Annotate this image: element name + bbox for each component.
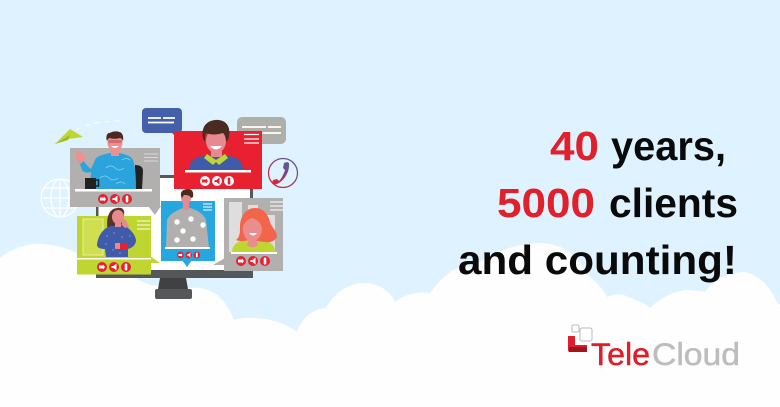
panel: blue caller with dotted sweater — [161, 189, 215, 267]
logo wordmark: Tele — [591, 336, 650, 372]
headline line 3: and counting! — [458, 237, 737, 283]
headline line 1 — [550, 123, 726, 169]
logo icon — [568, 325, 592, 352]
panel: green caller with mug — [77, 208, 160, 274]
headline line 2 — [497, 180, 738, 226]
logo wordmark: Cloud — [652, 336, 740, 372]
icon: paper plane — [55, 121, 122, 144]
logo wordmark — [591, 336, 740, 372]
panel: blue chat bubble — [142, 108, 182, 139]
panel: grey caller with red hair — [213, 198, 283, 271]
panel: grey chat bubble — [237, 117, 286, 144]
icon: phone — [268, 158, 298, 188]
icon: globe — [41, 179, 79, 217]
headline line 1: years, — [611, 123, 726, 169]
headline line 2: clients — [609, 180, 738, 226]
headline line 1: 40 — [550, 123, 599, 169]
cloud bank — [0, 243, 780, 407]
monitor — [96, 175, 253, 299]
headline — [458, 123, 738, 283]
panel: red caller — [174, 120, 262, 189]
illustration: video conference on a monitor — [41, 108, 298, 299]
headline line 2: 5000 — [497, 180, 595, 226]
logo: TeleCloud — [568, 325, 740, 372]
panel: grey caller waving — [70, 131, 161, 215]
